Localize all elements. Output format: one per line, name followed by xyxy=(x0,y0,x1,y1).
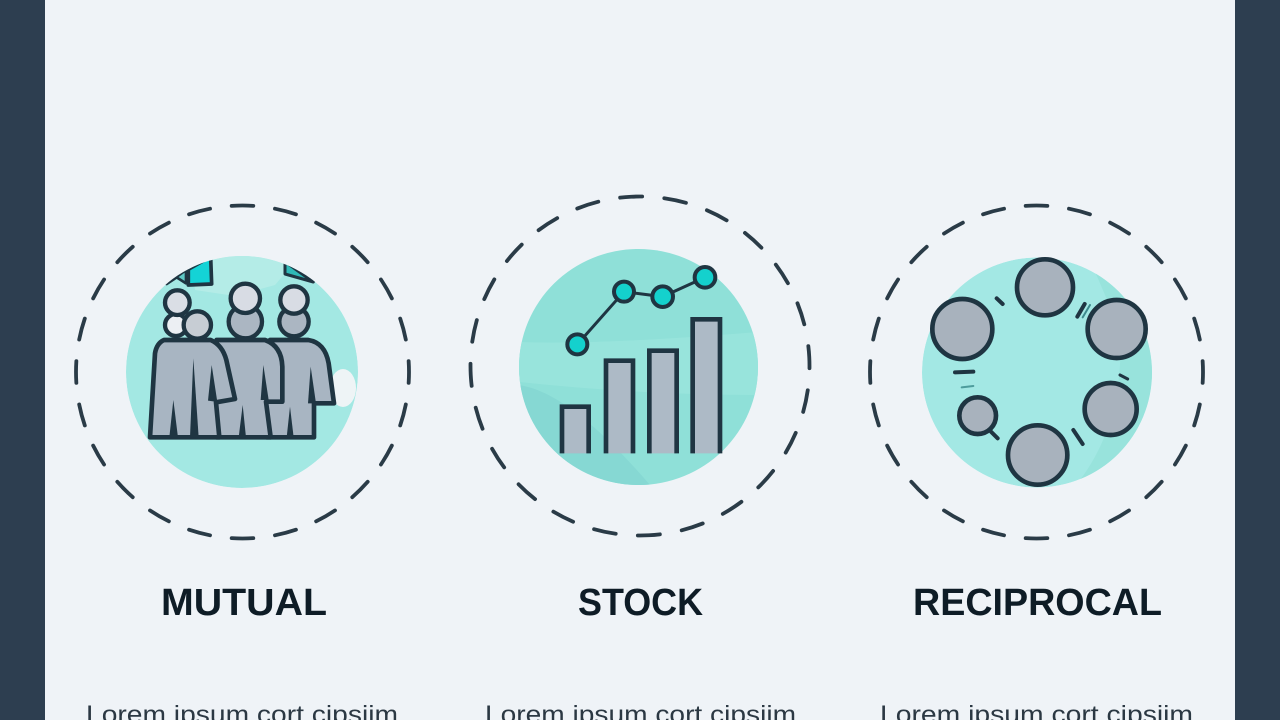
heading: stock: STOCK xyxy=(578,582,704,624)
dashed ring: reciprocal xyxy=(870,206,1203,538)
connector dashes xyxy=(955,298,1128,444)
trend line xyxy=(567,267,715,354)
heading: mutual: MUTUAL xyxy=(161,582,327,624)
heads xyxy=(165,284,309,339)
icon: bar chart with trend line xyxy=(562,267,720,453)
heading: reciprocal: RECIPROCAL xyxy=(913,582,1162,624)
panel: mutual xyxy=(76,206,409,538)
icon: ring of circles xyxy=(932,259,1146,485)
dashed ring: mutual xyxy=(76,206,409,538)
bodies xyxy=(150,340,334,437)
circles xyxy=(932,259,1146,485)
top tags xyxy=(167,257,313,285)
dashed ring: stock xyxy=(462,188,818,544)
teal disc: stock xyxy=(519,249,759,485)
panel: reciprocal xyxy=(870,206,1203,538)
teal disc: mutual xyxy=(126,256,358,488)
bars xyxy=(562,319,720,453)
icon: group of people xyxy=(150,284,334,437)
panel: stock xyxy=(462,188,818,544)
teal disc: reciprocal xyxy=(922,258,1155,488)
